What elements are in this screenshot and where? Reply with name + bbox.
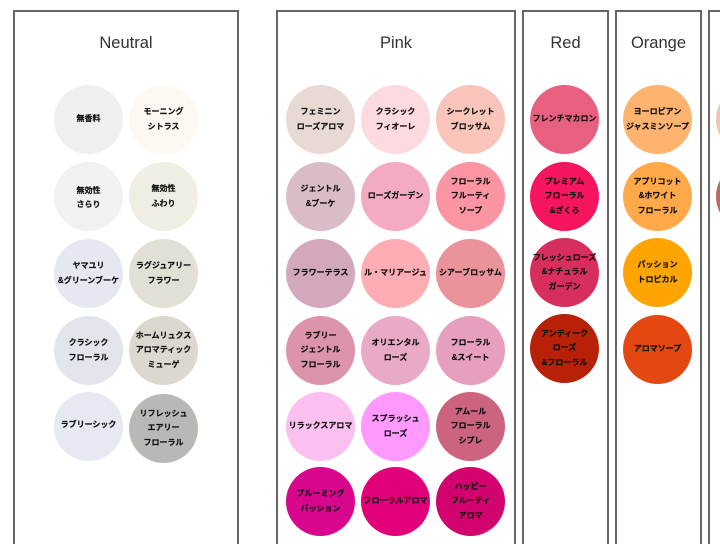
swatch: ブルーミングパッション: パッション <box>300 504 340 512</box>
swatch: ラブリージェントルフローラル <box>286 316 355 385</box>
swatch: cut-off brown circle <box>716 180 720 213</box>
swatch: ブルーミングパッション <box>286 467 355 536</box>
panel: Neutral <box>13 10 239 544</box>
swatch: ローズガーデン <box>361 162 430 231</box>
swatch: ハッピーフルーティアロマ: アロマ <box>458 511 482 520</box>
swatch: ラグジュアリーフラワー: ラグジュアリー <box>136 261 191 270</box>
swatch: リフレッシュエアリーフローラル: エアリー <box>148 423 180 432</box>
swatch: リフレッシュエアリーフローラル: フローラル <box>144 438 184 447</box>
swatch: フローラル&スイート <box>436 316 505 385</box>
swatch: シアーブロッサム <box>436 239 505 308</box>
swatch: ホームリュクスアロマティックミューゲ <box>129 316 198 385</box>
swatch: モーニングシトラス <box>129 85 198 154</box>
swatch: プレミアムフローラル&ざくろ: プレミアム <box>545 177 584 186</box>
swatch: モーニングシトラス: モーニング <box>144 107 184 116</box>
swatch: オリエンタルローズ: ローズ <box>384 352 407 362</box>
swatch: アロマソープ <box>623 315 692 384</box>
swatch: プレミアムフローラル&ざくろ: &ざくろ <box>550 206 579 215</box>
swatch: アンティークローズ&フローラル: ローズ <box>553 343 576 352</box>
panel: Pink <box>276 10 516 544</box>
swatch: フローラルフルーティソープ <box>436 162 505 231</box>
swatch: ハッピーフルーティアロマ: フルーティ <box>451 496 490 505</box>
swatch: 無効性さらり <box>54 162 123 231</box>
swatch: フローラルフルーティソープ: フルーティ <box>451 191 490 200</box>
swatch: ヨーロピアンジャスミンソープ: ジャスミンソープ <box>626 122 689 130</box>
swatch: ホームリュクスアロマティックミューゲ: ミューゲ <box>148 360 180 369</box>
swatch: 無香料: 無香料 <box>76 114 100 123</box>
swatch: フレッシュローズ&ナチュラルガーデン: &ナチュラル <box>542 267 587 276</box>
swatch: アプリコット&ホワイトフローラル: フローラル <box>638 206 678 215</box>
swatch: ラグジュアリーフラワー <box>129 239 198 308</box>
swatch: スプラッシュローズ: スプラッシュ <box>372 414 420 423</box>
swatch: リフレッシュエアリーフローラル <box>129 394 198 463</box>
swatch: ホームリュクスアロマティックミューゲ: ホームリュクス <box>136 331 191 340</box>
swatch: ヤマユリ&グリーンブーケ: &グリーンブーケ <box>58 276 119 284</box>
swatch: アムールフローラルシプレ: アムール <box>455 407 486 416</box>
swatch: フレッシュローズ&ナチュラルガーデン: ガーデン <box>548 282 580 291</box>
heading: Neutral: Neutral <box>99 34 153 52</box>
panel: cut-off next column <box>708 10 720 544</box>
swatch: アンティークローズ&フローラル <box>530 314 599 383</box>
swatch: フェミニンローズアロマ: ローズアロマ <box>297 122 344 130</box>
swatch: ブルーミングパッション: ブルーミング <box>296 489 344 498</box>
swatch: ル・マリアージュ <box>361 239 430 308</box>
swatch: アムールフローラルシプレ: フローラル <box>450 421 490 430</box>
swatch: ジェントル&ブーケ <box>286 162 355 231</box>
swatch: ジェントル&ブーケ: ジェントル <box>300 184 340 193</box>
swatch: フェミニンローズアロマ: フェミニン <box>300 107 340 116</box>
swatch: フローラルアロマ: フローラルアロマ <box>364 496 428 505</box>
swatch: プレミアムフローラル&ざくろ <box>530 162 599 231</box>
swatch: ホームリュクスアロマティックミューゲ: アロマティック <box>136 345 191 354</box>
swatch: 無効性さらり: さらり <box>76 200 100 209</box>
swatch: ラグジュアリーフラワー: フラワー <box>148 276 180 284</box>
panel: Red <box>522 10 609 544</box>
swatch: スプラッシュローズ <box>361 392 430 461</box>
swatch: ラブリージェントルフローラル: ジェントル <box>300 345 340 354</box>
swatch: フラワーテラス: フラワーテラス <box>293 268 348 277</box>
swatch: フェミニンローズアロマ <box>286 85 355 154</box>
heading: Pink: Pink <box>380 34 412 52</box>
swatch: 無効性さらり: 無効性 <box>76 186 100 195</box>
swatch: シークレットブロッサム: ブロッサム <box>451 122 490 130</box>
swatch: ヤマユリ&グリーンブーケ <box>54 239 123 308</box>
swatch: シークレットブロッサム <box>436 85 505 154</box>
swatch: アンティークローズ&フローラル: アンティーク <box>541 329 588 338</box>
swatch: ラブリージェントルフローラル: ラブリー <box>304 331 336 340</box>
heading: Orange: Orange <box>631 34 686 52</box>
swatch: パッショントロピカル <box>623 238 692 307</box>
swatch: アプリコット&ホワイトフローラル: アプリコット <box>634 177 682 186</box>
swatch: クラシックフローラル: クラシック <box>69 338 108 347</box>
swatch: フレンチマカロン: フレンチマカロン <box>532 114 596 123</box>
swatch: cut-off tan circle <box>716 104 720 136</box>
swatch: シークレットブロッサム: シークレット <box>446 107 494 116</box>
swatch: パッショントロピカル: トロピカル <box>638 274 678 284</box>
swatch: スプラッシュローズ: ローズ <box>384 428 407 438</box>
swatch: ヤマユリ&グリーンブーケ: ヤマユリ <box>72 261 104 270</box>
swatch: アプリコット&ホワイトフローラル <box>623 162 692 231</box>
heading: Red: Red <box>550 34 581 52</box>
swatch: 無効性ふわり: 無効性 <box>152 184 176 193</box>
swatch: ジェントル&ブーケ: &ブーケ <box>306 198 335 208</box>
swatch: クラシックフィオーレ: フィオーレ <box>376 122 415 130</box>
swatch: 無効性ふわり <box>129 162 198 231</box>
panel: Orange <box>615 10 702 544</box>
swatch: 無香料 <box>54 85 123 154</box>
swatch: モーニングシトラス: シトラス <box>148 122 179 130</box>
swatch: アロマソープ: アロマソープ <box>634 344 681 353</box>
swatch: オリエンタルローズ <box>361 316 430 385</box>
swatch: オリエンタルローズ: オリエンタル <box>372 338 420 347</box>
swatch: アプリコット&ホワイトフローラル: &ホワイト <box>639 191 676 200</box>
swatch: リラックスアロマ: リラックスアロマ <box>289 421 352 430</box>
swatch: ラブリーシック: ラブリーシック <box>61 420 116 429</box>
swatch: アムールフローラルシプレ: シプレ <box>458 436 482 445</box>
swatch: フローラル&スイート: フローラル <box>450 338 490 347</box>
swatch: ル・マリアージュ: ル・マリアージュ <box>364 268 427 277</box>
swatch: アンティークローズ&フローラル: &フローラル <box>542 358 587 367</box>
swatch: フローラルフルーティソープ: フローラル <box>450 177 490 186</box>
swatch: シアーブロッサム: シアーブロッサム <box>439 268 502 277</box>
swatch: ローズガーデン: ローズガーデン <box>368 191 423 200</box>
swatch: クラシックフィオーレ <box>361 85 430 154</box>
swatch: フラワーテラス <box>286 239 355 308</box>
swatch: クラシックフィオーレ: クラシック <box>376 107 415 116</box>
swatch: フレッシュローズ&ナチュラルガーデン <box>530 238 599 307</box>
swatch: ヨーロピアンジャスミンソープ <box>623 85 692 154</box>
swatch: ヨーロピアンジャスミンソープ: ヨーロピアン <box>634 107 681 116</box>
swatch: アムールフローラルシプレ <box>436 392 505 461</box>
swatch: ラブリーシック <box>54 392 123 461</box>
swatch: リフレッシュエアリーフローラル: リフレッシュ <box>140 409 188 418</box>
swatch: フローラル&スイート: &スイート <box>452 352 489 362</box>
swatch: ハッピーフルーティアロマ <box>436 467 505 536</box>
swatch: ラブリージェントルフローラル: フローラル <box>300 360 340 369</box>
swatch: フローラルアロマ <box>361 467 430 536</box>
swatch: プレミアムフローラル&ざくろ: フローラル <box>544 191 584 200</box>
swatch: フレッシュローズ&ナチュラルガーデン: フレッシュローズ <box>533 253 596 262</box>
swatch: パッショントロピカル: パッション <box>638 260 678 269</box>
swatch: リラックスアロマ <box>286 392 355 461</box>
swatch: フローラルフルーティソープ: ソープ <box>459 206 482 215</box>
swatch: クラシックフローラル <box>54 316 123 385</box>
swatch: ハッピーフルーティアロマ: ハッピー <box>454 482 486 491</box>
swatch: クラシックフローラル: フローラル <box>68 352 108 362</box>
swatch: 無効性ふわり: ふわり <box>152 198 176 208</box>
swatch: フレンチマカロン <box>530 85 599 154</box>
